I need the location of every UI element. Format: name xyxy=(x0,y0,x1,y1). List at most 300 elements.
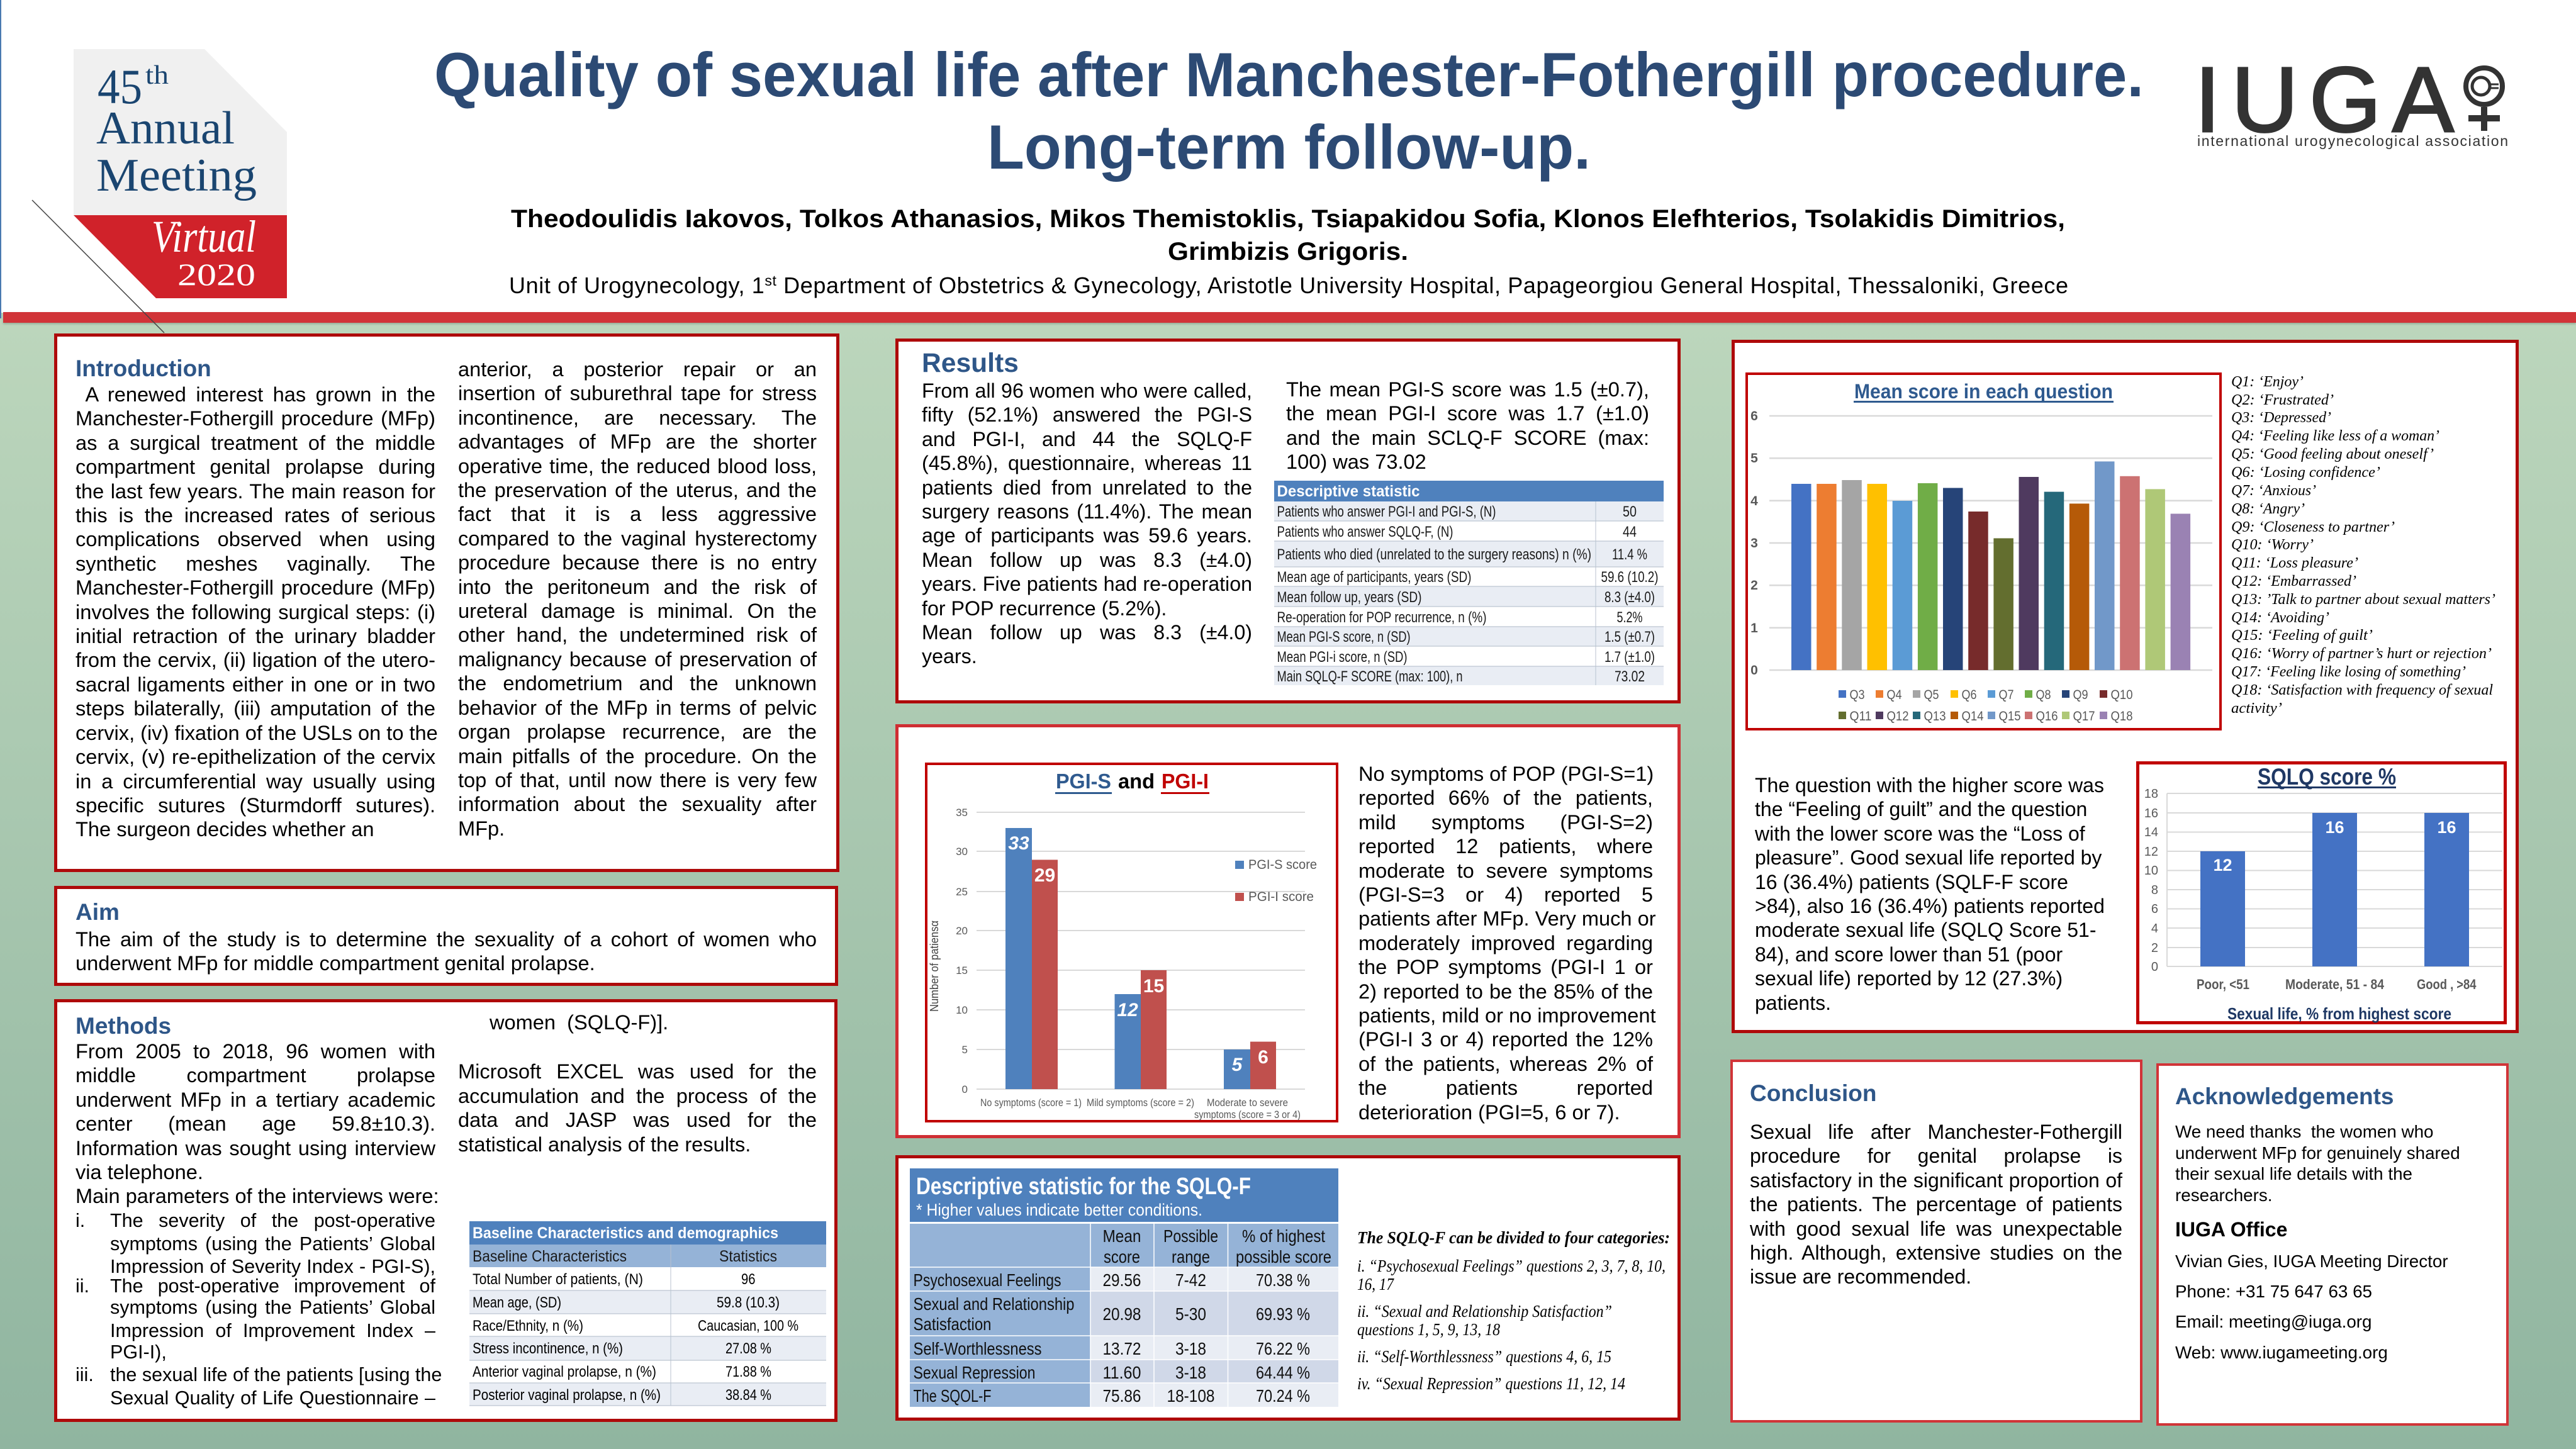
chart: mean score in each question: Q17 xyxy=(2073,709,2095,724)
text: results column 2: and the main SCLQ-F SCORE (max: xyxy=(1286,426,1649,449)
table: baseline characteristics xyxy=(469,1221,826,1406)
heading: introduction: Introduction xyxy=(76,355,211,381)
text: PGI findings: No symptoms of POP (PGI-S=1) xyxy=(1358,762,1654,785)
chart: mean score in each question xyxy=(1745,372,2222,730)
text: methods column 1: From 2005 to 2018, 96 women with xyxy=(76,1039,435,1063)
table: descriptive statistic: Mean follow up, years (SD) xyxy=(1277,589,1422,606)
heading: conclusion: Conclusion xyxy=(1750,1080,1876,1106)
text: introduction column 2: insertion of suburethral tape for stress xyxy=(458,381,817,405)
list: interview parameters: Sexual Quality of Life Questionnaire – xyxy=(110,1387,435,1409)
table: descriptive statistic: Patients who answer PGI-I and PGI-S, (N) xyxy=(1277,503,1496,520)
panel: results xyxy=(895,338,1681,703)
table: descriptive statistic: Re-operation for POP recurrence, n (%) xyxy=(1277,609,1486,626)
chart: PGI-S and PGI-I: 20 xyxy=(956,925,968,937)
text: introduction column 1: A renewed interest has grown in the xyxy=(85,383,435,406)
text: introduction column 2: MFp. xyxy=(458,817,505,840)
text: methods column 1: underwent MFp in a tertiary academic xyxy=(76,1088,435,1111)
chart: PGI-S and PGI-I: 5 xyxy=(962,1044,968,1056)
chart: mean score in each question: Q4 xyxy=(1886,688,1902,702)
text: acknowledgement body: their sexual life details with the xyxy=(2175,1164,2412,1183)
text: introduction column 1: Manchester-Fothergill procedure (MFp) xyxy=(76,576,435,599)
text: methods column 1: center (mean age 59.8±10.3). xyxy=(76,1112,435,1135)
table: baseline characteristics: Baseline Characteristics and demographics xyxy=(473,1224,778,1242)
text: results column 1: and PGI-I, and 44 the SQLQ-F xyxy=(922,428,1252,450)
text: question findings: >84), also 16 (36.4%) patients reported xyxy=(1755,895,2105,917)
header background xyxy=(0,0,2576,313)
table: SQLQ-F descriptive statistic: 5-30 xyxy=(1175,1304,1206,1324)
table: SQLQ-F descriptive statistic: 70.38 % xyxy=(1256,1270,1310,1290)
chart: PGI-S and PGI-I: 12 xyxy=(1117,1000,1138,1021)
table: SQLQ-F descriptive statistic: % of highest xyxy=(1242,1226,1325,1246)
table: baseline characteristics: Statistics xyxy=(719,1248,777,1265)
meeting logo: Virtual xyxy=(152,211,256,262)
text: introduction column 1: steps bilaterally, (iii) amputation of the xyxy=(76,697,435,720)
text: SQLQ-F categories: iv. “Sexual Repression” questions 11, 12, 14 xyxy=(1357,1374,1625,1393)
heading: methods: Methods xyxy=(76,1013,171,1039)
heading: acknowledgements: Acknowledgements xyxy=(2175,1083,2394,1109)
chart: PGI-S and PGI-I: Number of patiensα xyxy=(928,920,941,1012)
chart: SQLQ score percent xyxy=(2136,761,2507,1024)
table: SQLQ-F descriptive statistic: range xyxy=(1172,1247,1210,1267)
table: SQLQ-F descriptive statistic: 18-108 xyxy=(1167,1386,1214,1406)
table: SQLQ-F descriptive statistic: Satisfaction xyxy=(914,1314,992,1334)
table: SQLQ-F descriptive statistic: Sexual and Relationship xyxy=(914,1294,1075,1314)
meeting logo: 45 xyxy=(98,59,142,114)
text: question findings: 16 (36.4%) patients (SQLF-F score xyxy=(1755,871,2068,893)
chart: PGI-S and PGI-I: 35 xyxy=(956,807,968,819)
text: contact details: Email: meeting@iuga.org xyxy=(2175,1312,2372,1331)
chart: mean score in each question: 1 xyxy=(1750,621,1758,635)
chart: SQLQ score percent: 16 xyxy=(2325,818,2344,837)
chart: mean score in each question: 5 xyxy=(1750,451,1758,466)
chart: mean score in each question: 2 xyxy=(1750,578,1758,593)
table: baseline characteristics: 71.88 % xyxy=(725,1363,771,1380)
text: SQLQ-F categories: i. “Psychosexual Feelings” questions 2, 3, 7, 8, 10, xyxy=(1357,1256,1666,1275)
table: descriptive statistic: 11.4 % xyxy=(1612,546,1647,563)
text: introduction column 2: other hand, the undetermined risk of xyxy=(458,623,817,646)
chart: SQLQ score percent: 8 xyxy=(2151,883,2158,897)
table: descriptive statistic: 1.5 (±0.7) xyxy=(1604,629,1655,646)
panel: SQLQ-F statistics xyxy=(895,1155,1681,1421)
text: PGI findings: mild symptoms (PGI-S=2) xyxy=(1358,810,1653,834)
chart: mean score in each question: Q18 xyxy=(2110,709,2133,724)
text: acknowledgement body: underwent MFp for genuinely shared xyxy=(2175,1143,2460,1163)
chart: mean score in each question: Q14 xyxy=(1962,709,1984,724)
text: SQLQ-F categories: 16, 17 xyxy=(1357,1275,1394,1294)
text: methods column 2: women (SQLQ-F)]. xyxy=(490,1010,668,1034)
text: introduction column 1: sacral ligaments either in one or in two xyxy=(76,673,435,696)
authors xyxy=(511,205,2065,266)
text: conclusion: issue are recommended. xyxy=(1750,1265,1971,1288)
list: question key: Q14: ‘Avoiding’ xyxy=(2231,610,2329,626)
text: introduction column 1: The surgeon decides whether an xyxy=(76,817,374,841)
text: contact details: Web: www.iugameeting.org xyxy=(2175,1343,2388,1362)
text: SQLQ-F categories: ii. “Sexual and Relationship Satisfaction” xyxy=(1357,1302,1612,1321)
text: methods column 1 xyxy=(76,1039,439,1207)
chart: mean score in each question: Q15 xyxy=(1998,709,2021,724)
text: conclusion: Sexual life after Manchester-Fothergill xyxy=(1750,1121,2122,1143)
text: conclusion: high. Although, extensive studies on the xyxy=(1750,1241,2122,1264)
text: introduction column 2 xyxy=(458,357,817,840)
text: results column 1: patients died from unrelated to the xyxy=(922,476,1252,499)
chart: mean score in each question: Q11 xyxy=(1850,709,1871,724)
text: question findings: The question with the higher score was xyxy=(1755,774,2104,797)
text: contact details: Phone: +31 75 647 63 65 xyxy=(2175,1282,2372,1301)
text: methods column 1: Information was sought using interview xyxy=(76,1136,435,1160)
text: results column 1: Mean follow up was 8.3 (±4.0) xyxy=(922,621,1252,644)
text: methods column 1: via telephone. xyxy=(76,1160,203,1183)
text: introduction column 2: information about the sexuality after xyxy=(458,792,817,815)
text: introduction column 1: complications observed when using xyxy=(76,527,435,551)
chart: PGI-S and PGI-I: 0 xyxy=(962,1083,968,1095)
list: interview parameters: symptoms (using the Patients’ Global xyxy=(110,1233,435,1255)
table: baseline characteristics: Caucasian, 100 % xyxy=(698,1318,798,1334)
table: descriptive statistic: Patients who died (unrelated to the surgery reasons) n (%) xyxy=(1277,546,1591,563)
text: introduction column 2: advantages of MFp are the shorter xyxy=(458,430,817,453)
chart: PGI-S and PGI-I: 5 xyxy=(1232,1055,1243,1075)
chart: PGI-S and PGI-I: No symptoms (score = 1) xyxy=(980,1097,1082,1109)
text: introduction column 2: ureteral damage is minimal. On the xyxy=(458,599,817,622)
list: question key: Q12: ‘Embarrassed’ xyxy=(2231,573,2356,590)
chart: PGI-S and PGI-I: and xyxy=(1118,769,1155,793)
text: question findings: the “Feeling of guilt” and the question xyxy=(1755,798,2087,820)
text: conclusion: the patients. The percentage of patients xyxy=(1750,1193,2122,1216)
list: question key: Q4: ‘Feeling like less of a woman’ xyxy=(2231,428,2439,444)
panel: conclusion xyxy=(1730,1060,2142,1423)
title: Long-term follow-up. xyxy=(987,112,1591,182)
chart: SQLQ score percent: Moderate, 51 - 84 xyxy=(2285,976,2385,992)
chart: PGI-S and PGI-I: 30 xyxy=(956,846,968,858)
panel: introduction xyxy=(54,333,839,872)
table: descriptive statistic xyxy=(1274,481,1664,685)
table: SQLQ-F descriptive statistic: Descriptive statistic for the SQLQ-F xyxy=(916,1173,1251,1200)
text: results column 2: 100) was 73.02 xyxy=(1286,450,1426,473)
panel: aim xyxy=(54,886,838,986)
panel: methods xyxy=(54,999,837,1422)
text: methods column 2 xyxy=(458,1010,817,1156)
chart: mean score in each question: Q16 xyxy=(2036,709,2058,724)
table: baseline characteristics: 96 xyxy=(741,1271,755,1288)
text: methods column 2: data and JASP was used for the xyxy=(458,1108,817,1131)
text: introduction column 2: procedure because there is no entry xyxy=(458,551,817,574)
list: interview parameters: symptoms (using the Patients’ Global xyxy=(110,1297,435,1318)
table: SQLQ-F descriptive statistic xyxy=(910,1168,1338,1407)
table: SQLQ-F descriptive statistic: The SQOL-F xyxy=(914,1386,992,1406)
table: baseline characteristics: Mean age, (SD) xyxy=(473,1294,561,1311)
text: PGI findings: the POP symptoms (PGI-I 1 or xyxy=(1358,955,1653,978)
chart: mean score in each question: Q5 xyxy=(1924,688,1939,702)
table: descriptive statistic: Mean PGI-S score, n (SD) xyxy=(1277,629,1411,646)
list: question key: activity’ xyxy=(2231,700,2282,717)
text: conclusion: satisfactory in the significant proportion of xyxy=(1750,1169,2122,1192)
header xyxy=(31,40,2508,333)
table: baseline characteristics: Posterior vaginal prolapse, n (%) xyxy=(473,1387,661,1404)
text: introduction column 1: in a circumferential way usually using xyxy=(76,769,435,793)
chart: PGI-S and PGI-I: Mild symptoms (score = 2) xyxy=(1087,1097,1194,1109)
meeting logo: Annual xyxy=(96,103,235,154)
text: results column 1: for POP recurrence (5.2%). xyxy=(922,597,1167,620)
text: methods column 1: middle compartment prolapse xyxy=(76,1063,435,1087)
text: results column 1: fifty (52.1%) answered the PGI-S xyxy=(922,403,1252,426)
affiliation: st xyxy=(764,272,777,289)
table: descriptive statistic: 44 xyxy=(1623,523,1637,540)
table: descriptive statistic: 50 xyxy=(1623,503,1637,520)
table: baseline characteristics: Anterior vaginal prolapse, n (%) xyxy=(473,1363,656,1380)
chart: PGI-S and PGI-I: 15 xyxy=(1143,976,1164,997)
list: question key: Q18: ‘Satisfaction with frequency of sexual xyxy=(2231,682,2493,698)
table: baseline characteristics: Total Number of patients, (N) xyxy=(473,1271,643,1288)
text: introduction column 2: anterior, a posterior repair or an xyxy=(458,357,817,381)
text: results column 1: From all 96 women who were called, xyxy=(922,379,1252,402)
heading: results: Results xyxy=(922,348,1019,378)
table: SQLQ-F descriptive statistic: Mean xyxy=(1102,1226,1141,1246)
text: results column 2: the mean PGI-I score was 1.7 (±1.0) xyxy=(1286,401,1649,425)
IUGA logo: international urogynecological association xyxy=(2197,133,2508,149)
chart: mean score in each question: 3 xyxy=(1750,536,1758,551)
chart: PGI-S and PGI-I: PGI-S xyxy=(1056,769,1111,793)
text: results column 2: The mean PGI-S score was 1.5 (±0.7), xyxy=(1286,378,1649,401)
text: SQLQ-F categories: questions 1, 5, 9, 13, 18 xyxy=(1357,1320,1500,1339)
list: question key: Q1: ‘Enjoy’ xyxy=(2231,374,2304,390)
text: aim: underwent MFp for middle compartment genital prolapse. xyxy=(76,951,595,975)
text: introduction column 1: compartment genital prolapse during xyxy=(76,455,435,478)
text: acknowledgement body: We need thanks the women who xyxy=(2175,1122,2434,1141)
table: SQLQ-F descriptive statistic: 76.22 % xyxy=(1256,1339,1310,1358)
text: introduction column 1: specific sutures (Sturmdorff sutures). xyxy=(76,793,435,817)
table: SQLQ-F descriptive statistic: Possible xyxy=(1163,1226,1218,1246)
chart: SQLQ score percent: SQLQ score % xyxy=(2258,764,2396,790)
text: introduction column 1: synthetic meshes vaginally. The xyxy=(76,552,435,575)
text: introduction column 2: the preservation of the uterus, and the xyxy=(458,478,817,501)
panel: PGI scores xyxy=(895,724,1681,1138)
text: introduction column 1 xyxy=(76,383,438,841)
meeting logo: Meeting xyxy=(96,150,257,201)
chart: SQLQ score percent: 18 xyxy=(2144,787,2158,801)
chart: mean score in each question: Q12 xyxy=(1886,709,1909,724)
text: introduction column 2: behavior of the MFp in terms of pelvic xyxy=(458,696,817,719)
red header bar xyxy=(3,312,2576,323)
IUGA logo: IUGA xyxy=(2195,48,2454,152)
table: SQLQ-F descriptive statistic: 20.98 xyxy=(1102,1304,1141,1324)
text: introduction column 1: Manchester-Fothergill procedure (MFp) xyxy=(76,406,435,430)
table: SQLQ-F descriptive statistic: 29.56 xyxy=(1102,1270,1141,1290)
list: question key: Q15: ‘Feeling of guilt’ xyxy=(2231,627,2373,644)
text: PGI findings: of the patients, whereas 2% of xyxy=(1358,1052,1653,1075)
chart: SQLQ score percent: 16 xyxy=(2437,818,2456,837)
list: interview parameters: ii. xyxy=(76,1275,89,1297)
list: interview parameters: the sexual life of the patients [using the xyxy=(110,1364,442,1385)
table: SQLQ-F descriptive statistic: 7-42 xyxy=(1175,1270,1206,1290)
chart: SQLQ score percent: 4 xyxy=(2151,922,2158,936)
list: interview parameters: The post-operative improvement of xyxy=(110,1275,435,1297)
table: SQLQ-F descriptive statistic: 69.93 % xyxy=(1256,1304,1310,1324)
affiliation: Unit of Urogynecology, 1 xyxy=(509,272,764,298)
table: SQLQ-F descriptive statistic: 3-18 xyxy=(1175,1363,1206,1382)
table: descriptive statistic: 1.7 (±1.0) xyxy=(1604,649,1655,666)
panel: questionnaire results xyxy=(1732,340,2519,1033)
list: question key: Q17: ‘Feeling like losing of something’ xyxy=(2231,664,2466,680)
chart: PGI-S and PGI-I: 6 xyxy=(1258,1047,1268,1068)
chart: PGI-S and PGI-I: 33 xyxy=(1008,833,1029,854)
text: results column 1: (45.8%), questionnaire, whereas 11 xyxy=(922,452,1252,474)
list: question key: Q5: ‘Good feeling about oneself’ xyxy=(2231,446,2434,462)
text: introduction column 2: top of that, until now there is very few xyxy=(458,768,817,792)
title xyxy=(434,40,2144,182)
table: descriptive statistic: 8.3 (±4.0) xyxy=(1604,589,1655,606)
list: question key: Q16: ‘Worry of partner’s hurt or rejection’ xyxy=(2231,646,2492,662)
chart: mean score in each question: 4 xyxy=(1750,494,1758,508)
text: PGI findings: (PGI-S=3 or 4) reported 5 xyxy=(1358,883,1653,906)
chart: mean score in each question: 6 xyxy=(1750,409,1758,423)
text: introduction column 1: cervix, (iv) fixation of the USLs on to the xyxy=(76,721,438,744)
text: introduction column 1: from the cervix, (ii) ligation of the utero- xyxy=(76,648,435,671)
text: introduction column 1: initial retraction of the urinary bladder xyxy=(76,624,435,647)
list: question key: Q10: ‘Worry’ xyxy=(2231,537,2314,553)
text: methods column 2: statistical analysis of the results. xyxy=(458,1133,751,1156)
text: introduction column 1: cervix, (v) re-epithelization of the cervix xyxy=(76,745,435,768)
chart: mean score in each question: Q13 xyxy=(1924,709,1946,724)
table: SQLQ-F descriptive statistic: * Higher values indicate better conditions. xyxy=(916,1200,1202,1219)
table: descriptive statistic: 59.6 (10.2) xyxy=(1601,569,1659,586)
table: SQLQ-F descriptive statistic: Psychosexual Feelings xyxy=(914,1270,1061,1290)
text: results column 1: surgery reasons (11.4%). The mean xyxy=(922,500,1252,523)
text: PGI findings: patients after MFp. Very much or xyxy=(1358,907,1656,930)
chart: SQLQ score percent: 10 xyxy=(2144,864,2158,878)
table: SQLQ-F descriptive statistic: Self-Worthlessness xyxy=(914,1339,1042,1358)
list: interview parameters: PGI-I), xyxy=(110,1341,167,1363)
text: aim: The aim of the study is to determine the sexuality of a cohort of women who xyxy=(76,927,817,951)
text: PGI findings: patients, mild or no improvement xyxy=(1358,1004,1656,1027)
chart: SQLQ score percent: 0 xyxy=(2151,960,2158,974)
chart: SQLQ score percent: 12 xyxy=(2144,845,2158,859)
text: introduction column 2: main pitfalls of the procedure. On the xyxy=(458,744,817,768)
chart: SQLQ score percent: 6 xyxy=(2151,902,2158,916)
text: introduction column 2: into the peritoneum and the risk of xyxy=(458,575,817,598)
chart: mean score in each question: Q8 xyxy=(2036,688,2051,702)
table: SQLQ-F descriptive statistic: 75.86 xyxy=(1102,1386,1141,1406)
list: interview parameters: iii. xyxy=(76,1364,94,1385)
text: results column 1: age of participants was 59.6 years. xyxy=(922,524,1252,547)
text: introduction column 2: the endometrium and the unknown xyxy=(458,671,817,695)
list: question key: Q8: ‘Angry’ xyxy=(2231,501,2305,517)
text: results column 2 xyxy=(1286,378,1649,473)
chart: PGI-S and PGI-I: symptoms (score = 3 or 4) xyxy=(1194,1109,1301,1121)
table: baseline characteristics: 27.08 % xyxy=(725,1340,771,1357)
table: baseline characteristics: 59.8 (10.3) xyxy=(717,1294,780,1311)
table: descriptive statistic: 5.2% xyxy=(1617,609,1642,626)
chart: SQLQ score percent: 12 xyxy=(2213,856,2232,875)
table: descriptive statistic: Mean PGI-i score, n (SD) xyxy=(1277,649,1407,666)
table: SQLQ-F descriptive statistic: 70.24 % xyxy=(1256,1386,1310,1406)
chart: SQLQ score percent: Good , >84 xyxy=(2417,976,2477,992)
text: results column 1: years. xyxy=(922,645,977,668)
text: PGI findings: deterioration (PGI=5, 6 or 7). xyxy=(1358,1100,1620,1124)
text: results column 1: years. Five patients had re-operation xyxy=(922,573,1252,595)
text: introduction column 1: this is the increased rates of serious xyxy=(76,503,435,527)
text: question findings xyxy=(1755,774,2105,1014)
chart: PGI-S and PGI-I: 25 xyxy=(956,886,968,898)
text: PGI findings: reported 12 patients, where xyxy=(1358,834,1653,858)
chart: mean score in each question: Q3 xyxy=(1850,688,1865,702)
table: SQLQ-F descriptive statistic: 13.72 xyxy=(1102,1339,1141,1358)
list: question key: Q7: ‘Anxious’ xyxy=(2231,483,2316,499)
text: contact details xyxy=(2175,1251,2448,1362)
text: question findings: pleasure”. Good sexual life reported by xyxy=(1755,846,2102,869)
text: question findings: with the lower score was the “Loss of xyxy=(1755,822,2085,845)
table: baseline characteristics: Race/Ethnity, n (%) xyxy=(473,1318,583,1334)
table: SQLQ-F descriptive statistic: possible score xyxy=(1236,1247,1331,1267)
text: introduction column 2: compared to the vaginal hysterectomy xyxy=(458,527,817,550)
chart: PGI-S and PGI-I: PGI-S score xyxy=(1248,858,1317,872)
text: SQLQ-F categories: The SQLQ-F can be divided to four categories: xyxy=(1357,1228,1670,1247)
chart: SQLQ score percent: 2 xyxy=(2151,941,2158,955)
chart: PGI-S and PGI-I: PGI-I xyxy=(1162,769,1209,793)
chart: PGI-S and PGI-I: 29 xyxy=(1034,865,1055,886)
list: question key: Q6: ‘Losing confidence’ xyxy=(2231,464,2380,481)
chart: mean score in each question: Q6 xyxy=(1962,688,1977,702)
meeting logo: th xyxy=(145,61,169,90)
title: Quality of sexual life after Manchester-Fothergill procedure. xyxy=(434,40,2144,109)
list: interview parameters: Impression of Severity Index - PGI-S), xyxy=(110,1256,435,1277)
chart: PGI-S and PGI-I: 15 xyxy=(956,965,968,976)
text: PGI findings xyxy=(1358,762,1656,1124)
list: question key: Q11: ‘Loss pleasure’ xyxy=(2231,555,2358,571)
table: descriptive statistic: Patients who answer SQLQ-F, (N) xyxy=(1277,523,1453,540)
text: introduction column 2: malignancy because of preservation of xyxy=(458,647,817,671)
text: PGI findings: (PGI-I 3 or 4) reported the 12% xyxy=(1358,1027,1653,1051)
text: methods column 1: Main parameters of the interviews were: xyxy=(76,1184,439,1207)
chart: SQLQ score percent: 16 xyxy=(2144,807,2158,820)
table: baseline characteristics: 38.84 % xyxy=(725,1387,771,1404)
text: PGI findings: 2) reported to be the 85% of the xyxy=(1358,980,1653,1003)
chart: mean score in each question: Q10 xyxy=(2110,688,2133,702)
affiliation: Department of Obstetrics & Gynecology, Aristotle University Hospital, Papageorgiou General Hospital, Thessaloniki, Greece xyxy=(777,272,2068,298)
text: methods column 2: Microsoft EXCEL was used for the xyxy=(458,1060,817,1083)
table: SQLQ-F descriptive statistic: 3-18 xyxy=(1175,1339,1206,1358)
chart: mean score in each question: Q9 xyxy=(2073,688,2088,702)
table: SQLQ-F descriptive statistic: score xyxy=(1104,1247,1140,1267)
authors: Grimbizis Grigoris. xyxy=(1168,238,1408,266)
text: SQLQ-F categories xyxy=(1357,1228,1670,1393)
text: introduction column 2: organ prolapse recurrence, are the xyxy=(458,720,817,743)
text: introduction column 2: fact that it is a less aggressive xyxy=(458,502,817,525)
table: descriptive statistic: Mean age of participants, years (SD) xyxy=(1277,569,1471,586)
chart: PGI-S and PGI-I: Moderate to severe xyxy=(1207,1097,1288,1109)
text: conclusion: with good sexual life was unexpectable xyxy=(1750,1217,2122,1240)
heading: IUGA office: IUGA Office xyxy=(2175,1218,2287,1241)
text: conclusion: procedure for genital prolapse is xyxy=(1750,1144,2122,1167)
list: question key: Q2: ‘Frustrated’ xyxy=(2231,392,2334,408)
text: conclusion xyxy=(1750,1121,2123,1288)
panel: acknowledgements xyxy=(2156,1063,2509,1426)
text: introduction column 1: as a surgical treatment of the middle xyxy=(76,431,435,454)
text: PGI findings: moderately improved regarding xyxy=(1358,931,1653,954)
table: baseline characteristics: Stress incontinence, n (%) xyxy=(473,1340,623,1357)
text: PGI findings: moderate to severe symptoms xyxy=(1358,859,1653,882)
table: descriptive statistic: 73.02 xyxy=(1615,668,1645,685)
list: interview parameters: Impression of Improvement Index – xyxy=(110,1320,435,1341)
chart: PGI-S and PGI-I xyxy=(925,763,1338,1122)
table: baseline characteristics: Baseline Characteristics xyxy=(473,1248,627,1265)
table: SQLQ-F descriptive statistic: Sexual Repression xyxy=(914,1363,1036,1382)
list: interview parameters xyxy=(76,1210,442,1409)
table: SQLQ-F descriptive statistic: 64.44 % xyxy=(1256,1363,1310,1382)
text: acknowledgement body xyxy=(2175,1122,2460,1205)
text: introduction column 1: involves the following surgical steps: (i) xyxy=(76,600,435,624)
authors: Theodoulidis Iakovos, Tolkos Athanasios, Mikos Themistoklis, Tsiapakidou Sofia, Klonos Elefhterios, Tsolakidis Dimitrios, xyxy=(511,205,2065,233)
chart: SQLQ score percent: 14 xyxy=(2144,825,2158,839)
table: SQLQ-F descriptive statistic: 11.60 xyxy=(1102,1363,1141,1382)
